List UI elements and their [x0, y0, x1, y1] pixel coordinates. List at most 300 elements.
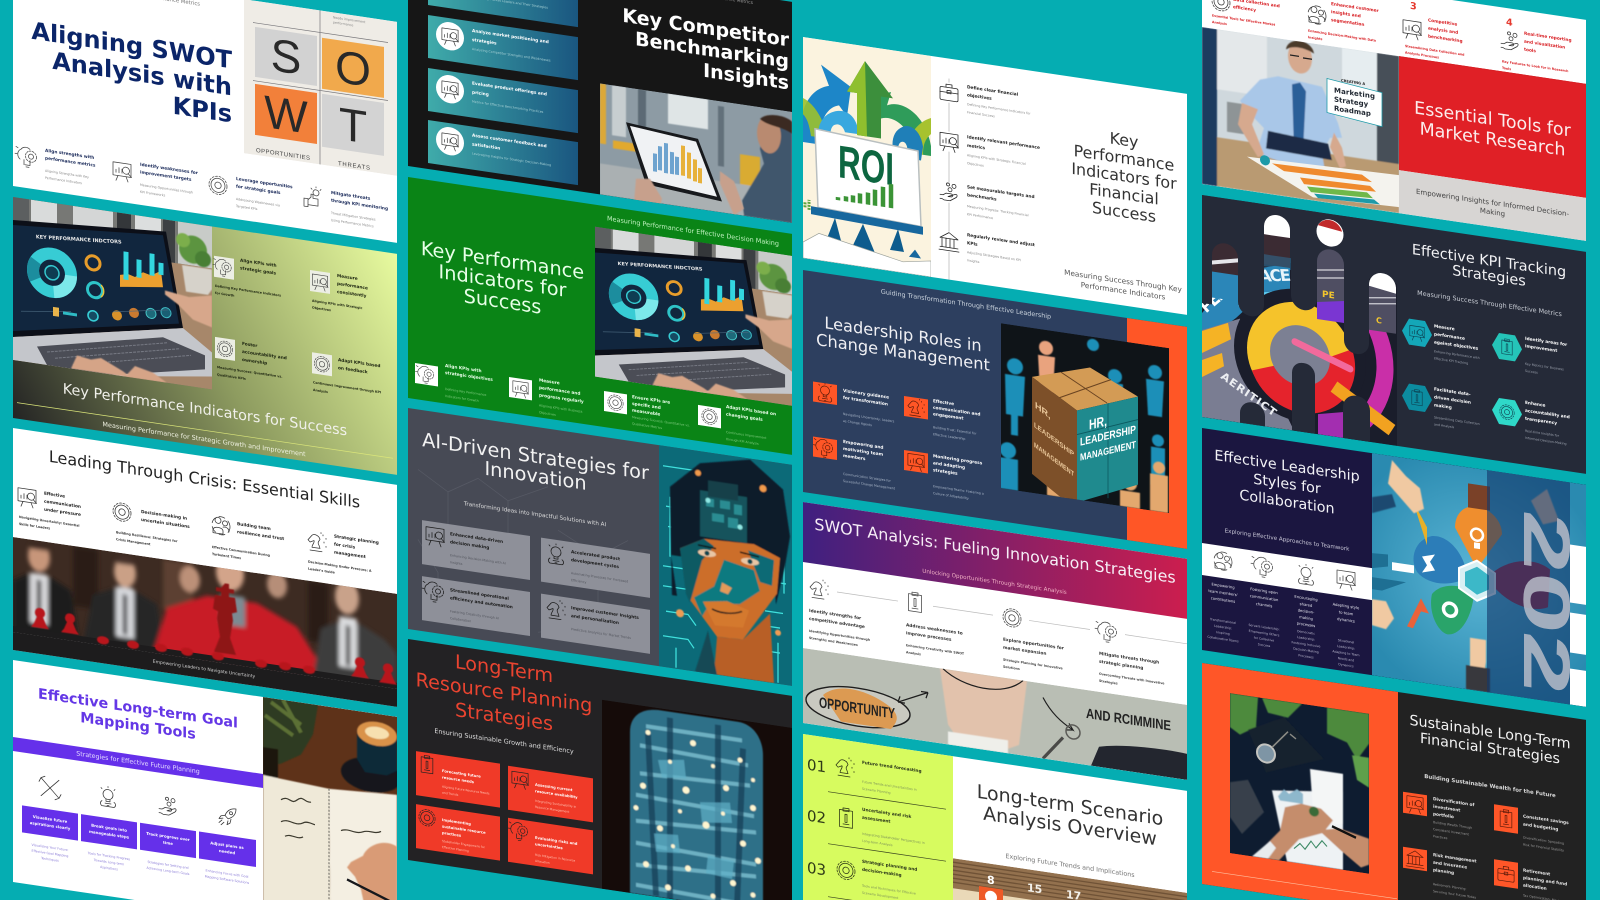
image: SWOT grid: W	[264, 85, 308, 144]
item: accountability: Real-time Insights for	[1525, 429, 1559, 438]
column: empowering: Inspiring	[1216, 630, 1230, 636]
subtitle: Empowering Insights for Informed Decision-	[1416, 187, 1569, 218]
item: competitive analysis: 3	[1410, 1, 1417, 13]
column: empowering: Collaborative Teams	[1207, 635, 1239, 643]
item: measurable targets: KPI Performance	[967, 212, 993, 220]
item: measure performance	[310, 269, 368, 318]
item: measure performance: Effective KPI Tracking	[1434, 356, 1468, 365]
item: effective communication: Effective	[44, 492, 65, 500]
title: Aligning SWOT	[31, 17, 232, 74]
card: implementing sustainable: Effective Planning	[442, 845, 469, 853]
card: operational efficiency	[422, 576, 530, 636]
column: adapting	[1332, 602, 1360, 669]
card: evaluate product offerings: Evaluate product offerings and	[472, 81, 547, 98]
item: visionary guidance: for transformation	[843, 395, 888, 408]
item: adapt KPIs	[698, 400, 776, 448]
image: calendar on wooden blinds: 8	[987, 873, 995, 887]
item: data efficiency: Analysis	[1212, 20, 1227, 26]
slide: Key Performance Indicators for Financial Success	[799, 36, 1187, 315]
item: align KPIs: strategic goals	[240, 265, 277, 277]
item: data-driven	[1402, 382, 1480, 433]
item: real-time reporting	[1501, 16, 1572, 80]
step 02: Long-term Analysis	[862, 839, 893, 847]
item: customer insights	[1308, 0, 1380, 50]
column: fostering: Empowering Others	[1249, 629, 1280, 637]
title: Success	[464, 284, 541, 319]
step: track progress: Track progress over	[146, 831, 190, 842]
item: align strengths: Align strengths with	[45, 149, 94, 161]
item: review and adjust	[939, 228, 1035, 272]
subtitle: Building Sustainable Wealth for the Future	[1424, 774, 1556, 799]
column: fostering: Fostering open	[1250, 587, 1278, 595]
step: break goals: Tools for Tracking Progress	[88, 851, 130, 861]
item: align KPIs: Defining Key Performance Indicators	[215, 284, 281, 298]
column: adapting: Needs and	[1338, 656, 1354, 663]
title: Sustainable Long-Term	[1409, 713, 1571, 753]
item: strengths	[809, 578, 898, 653]
image: hands around team hexagon: 202	[1509, 506, 1583, 699]
column: adapting: Adapting style	[1333, 602, 1359, 610]
column: encouraging: Decision-Making	[1293, 647, 1319, 654]
item: align KPIs: Align KPIs with	[240, 259, 277, 269]
image: SWOT grid: O	[335, 40, 371, 97]
item: measure performance: Aligning KPIs with Business	[539, 403, 582, 414]
title: Long-term Scenario	[977, 780, 1163, 830]
item: strategic planning: Decision-Making Under Pressure: A	[308, 560, 371, 573]
card: evaluate product offerings: pricing	[472, 89, 489, 98]
card: evaluate product offerings: Metrics for Effective Benchmarking Practices	[472, 99, 544, 114]
subtitle: Transforming Ideas into Impactful Solutions with AI	[463, 501, 606, 528]
image: calendar on wooden blinds	[953, 858, 1187, 900]
step: track progress	[140, 793, 196, 877]
item: relevant metrics: Aligning KPIs with Strategic Financial	[967, 153, 1026, 166]
image: KPI dial with finger cut-outs	[1195, 195, 1397, 446]
item: measure performance: performance and	[539, 385, 580, 397]
subtitle: Performance Indicators	[1081, 280, 1165, 302]
item: accountability	[1492, 395, 1570, 446]
item: adapt KPIs: changing goals	[726, 412, 763, 423]
item: decision-making: Building Resilience: Strategies for	[116, 530, 177, 543]
step: visualize	[22, 773, 78, 866]
item: ensure KPIs specific: Qualitative Metrics	[632, 422, 662, 430]
item: building team: Turbulent Times	[212, 552, 241, 560]
title: Collaboration	[1239, 488, 1335, 518]
card: data-driven decisions: Enhanced data-driven	[450, 532, 503, 545]
image: leadership cube and figures: HR,	[1035, 400, 1051, 422]
subtitle: Measuring Performance for Strategic Growth and Improvement	[102, 420, 306, 458]
step 02: 02	[807, 807, 826, 827]
item: strategic planning: Leader's Guide	[308, 567, 336, 575]
item: empowering teams: members	[843, 453, 866, 462]
item: define objectives: Define clear financial	[967, 85, 1018, 98]
item: adapt KPIs: Continuous Improvement	[726, 430, 766, 440]
item: adapt KPIs	[312, 352, 381, 402]
item: accountability: transparency	[1525, 416, 1557, 427]
step: adjust plans	[199, 804, 256, 886]
column: fostering: Servant Leadership:	[1248, 623, 1280, 631]
item: diversification: Practices	[1433, 834, 1448, 840]
item: measure performance: performance	[337, 281, 368, 292]
item: savings: Risk for Financial Stability	[1523, 843, 1564, 853]
item: adapt KPIs: Adapt KPIs based on	[726, 405, 776, 417]
title: Market Research	[1420, 119, 1565, 161]
image: marketing strategy roadmap	[1202, 27, 1399, 214]
item: empowering teams: Empowering and	[843, 440, 884, 451]
image: leadership cube and figures: MANAGEMENT	[1080, 440, 1137, 464]
item: measure performance: Aligning KPIs with Strategic	[312, 299, 362, 310]
icon: communication	[1251, 556, 1272, 578]
item: effective communication: Navigating Uncertainty: Essential	[19, 515, 79, 528]
step 03	[807, 851, 917, 900]
image: calendar on wooden blinds: 15	[1027, 881, 1042, 896]
item: identify areas: Identify areas for	[1525, 337, 1567, 348]
title: Strategies	[1452, 263, 1526, 290]
item: threats: Strategies	[1099, 679, 1118, 686]
column: encouraging: Fostering Inclusive	[1292, 640, 1321, 649]
step: break goals: Break goals into	[91, 823, 127, 833]
item: data efficiency	[1212, 0, 1280, 34]
subtitle: Guiding Transformation Through Effective Leadership	[881, 288, 1051, 321]
item: strategic planning: management	[334, 550, 366, 560]
card: evaluating risks: Evaluating risks and	[535, 836, 577, 846]
item: measure performance: Measure	[1434, 324, 1455, 332]
step: adjust plans: Adjust plans as	[210, 840, 244, 850]
image: notebook on wooden table	[263, 697, 397, 900]
card: analyze market positioning: strategies	[472, 37, 497, 47]
step: break goals	[81, 783, 137, 874]
title: Effective Leadership	[1214, 448, 1360, 485]
title: Effective Long-term Goal	[38, 686, 238, 732]
card: assess customer feedback: satisfaction	[472, 141, 500, 152]
title: Essential Tools for	[1414, 98, 1571, 142]
item: accountability: accountability and	[1525, 408, 1570, 420]
title: Key Performance	[421, 237, 584, 284]
item: mitigate threats: through KPI monitoring	[331, 198, 388, 212]
step 03: Tools and Techniques for Effective	[862, 884, 916, 896]
card: assess customer feedback: Assess customer feedback and	[472, 133, 547, 150]
item: mitigate threats	[304, 185, 388, 231]
item: risk management: Risk management	[1433, 853, 1476, 865]
title: Change Management	[816, 330, 990, 375]
column: empowering: contributions	[1211, 596, 1235, 604]
image: hands around team hexagon	[1372, 453, 1586, 707]
card: accelerated product	[541, 538, 650, 598]
item: effective communication: Building Trust: Essential for	[933, 425, 976, 436]
image: SWOT grid: THREATS	[338, 161, 370, 172]
subtitle panel	[1399, 170, 1586, 241]
item: visionary guidance: as Change Agents	[843, 419, 872, 427]
column: fostering: for Collective	[1254, 636, 1274, 643]
item: data-driven: Streamlining Data Collection	[1434, 415, 1480, 426]
image: SWOT grid: S	[271, 28, 301, 85]
slide: Long-Term Resource Planning Strategies	[408, 639, 792, 900]
card: accelerated product: Automating Processes for Increased	[571, 571, 628, 584]
item: measure performance: performance	[1434, 331, 1465, 342]
column: fostering: communication	[1250, 594, 1279, 602]
card: accelerated product: development cycles	[571, 557, 619, 570]
title: Strategies	[455, 698, 553, 735]
column: fostering: Success	[1258, 642, 1271, 648]
card: identify competitors	[428, 0, 578, 27]
step 02: Uncertainty and risk	[862, 808, 911, 820]
item: review and adjust: KPIs	[967, 240, 978, 248]
icon band	[1202, 543, 1372, 600]
image: SWOT grid: OPPORTUNITIES	[256, 148, 310, 162]
card: operational efficiency: efficiency and automation	[450, 595, 513, 611]
card: implementing sustainable: sustainable resource	[442, 825, 486, 835]
card: analyze market positioning: Analyze market positioning and	[472, 29, 549, 45]
image: KPI dial with finger cut-outs: AERITICT	[1219, 370, 1279, 419]
item: weaknesses: Enhancing Creativity with SWOT	[906, 643, 964, 656]
step: visualize: Techniques	[40, 856, 59, 863]
step: adjust plans: needed	[219, 848, 235, 855]
step: track progress: Achieving Long-term Goals	[147, 866, 190, 876]
image: chess king and executives	[13, 537, 397, 689]
item: strengths: Identifying Opportunities through	[809, 629, 870, 642]
item: threats: Mitigate threats through	[1099, 652, 1159, 666]
item: effective communication: engagement	[933, 411, 963, 422]
item: risk management: Retirement Planning:	[1433, 882, 1467, 891]
icon: shared decisions	[1298, 563, 1314, 586]
column: adapting: to team	[1339, 610, 1354, 616]
item: mitigate threats: Using Performance Metrics	[331, 218, 374, 228]
title: Financial Strategies	[1420, 731, 1560, 767]
item: savings	[1494, 804, 1569, 853]
item: competitive analysis: Competitive	[1428, 18, 1457, 28]
image: AI circuit face	[659, 445, 792, 686]
column: encouraging: making	[1299, 615, 1313, 621]
column: encouraging: Processes	[1298, 653, 1314, 660]
title: Styles for	[1253, 472, 1321, 498]
card: evaluating risks: Risk Mitigation in Resource	[535, 853, 575, 863]
card: accelerated product: Efficiency	[571, 578, 586, 584]
item: effective communication	[18, 487, 81, 535]
step: visualize: Visualize future	[33, 814, 67, 824]
item: measurable targets: Set measurable targets and	[967, 185, 1035, 200]
item: identify weaknesses	[113, 158, 199, 202]
column: encouraging: Democratic	[1297, 629, 1315, 636]
item: adapt KPIs: through KPI Analysis	[726, 437, 759, 446]
column: encouraging	[1292, 594, 1321, 661]
title panel	[1399, 56, 1586, 198]
item: relevant metrics	[940, 130, 1040, 176]
step 03: decision-making	[862, 867, 902, 879]
card: data-driven decisions	[422, 520, 530, 580]
card: implementing sustainable: Implementing	[442, 818, 471, 826]
item: measure performance: consistently	[337, 289, 367, 299]
item: align KPIs: Align KPIs with	[445, 364, 482, 374]
image: SWOT grid: T	[339, 97, 367, 153]
item: decision-making: Decision-making in	[141, 510, 187, 522]
image: glowing glass jars	[602, 700, 792, 900]
item: foster accountability: Qualitative KPIs	[217, 373, 246, 381]
item: opportunities: Solutions	[1003, 665, 1020, 671]
card: customer insights: Improved customer insights	[571, 606, 639, 621]
title: Long-Term	[455, 650, 553, 687]
item: ensure KPIs specific: Ensure KPIs are	[632, 395, 670, 406]
item: review and adjust: Regularly review and adjust	[967, 233, 1035, 248]
column: empowering: team members'	[1208, 589, 1238, 597]
item: measurable targets: Measuring Progress: Tracking Financial	[967, 204, 1029, 217]
card: operational efficiency: Streamlined operational	[450, 588, 509, 602]
card: accelerated product: Accelerated product	[571, 550, 620, 562]
item: visionary guidance: Visionary guidance	[843, 389, 889, 401]
item: weaknesses: Analysis	[906, 650, 921, 656]
title: Indicators for	[439, 260, 566, 302]
item: foster accountability: ownership	[242, 357, 267, 367]
item: relevant metrics: Objectives	[967, 161, 984, 168]
item: identify areas	[1492, 331, 1568, 379]
icon: adapting	[1337, 570, 1356, 591]
item: define objectives	[940, 80, 1031, 124]
slide: Key Performance Indicators for Success (olive)	[13, 197, 397, 475]
item: diversification: Building Wealth Through	[1433, 820, 1472, 830]
card: customer insights	[541, 594, 650, 654]
item: customer insights: insights and	[1331, 9, 1361, 19]
item: building team	[212, 515, 284, 567]
item: visionary guidance: Navigating Uncertainty: Leaders	[843, 412, 894, 424]
title: Insights	[703, 59, 789, 94]
item: monitoring progress: and adapting	[933, 460, 965, 471]
image: hands reviewing financial charts	[1230, 693, 1369, 874]
step 03: Strategic planning and	[862, 860, 917, 873]
item: customer insights: segmentation	[1331, 17, 1364, 28]
title: Leading Through Crisis: Essential Skills	[49, 447, 360, 512]
card: data-driven decisions: Enhancing Decision-Making with AI	[450, 553, 506, 565]
step: break goals: manageable steps	[89, 829, 130, 840]
column: empowering: Empowering	[1211, 582, 1235, 590]
footer caption: Empowering Leaders to Navigate Uncertainty	[153, 659, 256, 680]
image: ROI monitor with arrows: ROI	[838, 135, 894, 195]
item: measure performance: Objectives	[312, 306, 331, 312]
item: identify weaknesses: KPI Frameworks	[140, 190, 166, 198]
header band	[803, 502, 1187, 619]
item: measure performance: Measure	[539, 378, 560, 386]
card: forecasting: resource needs	[442, 776, 475, 784]
image: leadership cube and figures: HR,	[1089, 414, 1107, 434]
image: SWOT grid: Needs improvement	[333, 15, 365, 24]
card: customer insights: and personalization	[571, 613, 619, 626]
title: Performance	[1074, 141, 1174, 175]
item: measure performance: progress regularly	[539, 392, 584, 405]
item: identify weaknesses: Measuring Opportunities through	[140, 183, 193, 195]
item: foster accountability	[215, 337, 287, 387]
item: monitoring progress: Empowering Teams: Fostering a	[933, 484, 984, 496]
title: KPIs	[173, 92, 232, 128]
image: marketing strategy roadmap: Strategy	[1334, 95, 1369, 109]
item: effective communication: Effective Leadership	[933, 432, 965, 441]
item: identify weaknesses: improvement targets	[140, 169, 192, 183]
slide: Key Competitor Benchmarking Insights	[408, 0, 792, 226]
step 01: Future Trends and Uncertainties in	[862, 780, 917, 792]
item: weaknesses: improve processes	[906, 630, 952, 643]
item: diversification: investment	[1433, 804, 1460, 814]
step 01	[807, 752, 922, 800]
item: customer insights: Enhancing Decision-Making with Data	[1308, 29, 1376, 43]
item: define objectives: Defining Key Performance Indicators for	[967, 102, 1030, 116]
item: data-driven: driven decision	[1434, 394, 1471, 406]
subtitle: Exploring Effective Approaches to Teamwork	[1225, 528, 1350, 553]
title: Leadership Roles in	[824, 313, 982, 355]
item: review and adjust: Adjusting Strategies Based on KPI	[967, 250, 1021, 262]
item: retirement: allocation	[1523, 883, 1547, 892]
step: track progress: Strategies for Setting and	[147, 860, 189, 870]
item: monitoring progress	[904, 449, 984, 503]
column: encouraging: Encouraging	[1294, 595, 1318, 602]
item: building team: Building team	[237, 522, 271, 532]
column: fostering: channels	[1256, 602, 1272, 608]
item: competitive analysis: benchmarking	[1428, 33, 1463, 45]
step: visualize: Effective Goal Mapping	[32, 849, 68, 858]
column: encouraging: decision-	[1298, 608, 1315, 615]
item: risk management: planning	[1433, 867, 1454, 876]
subtitle: Ensuring Sustainable Growth and Efficiency	[434, 727, 574, 756]
column: empowering: Transformational	[1210, 617, 1236, 625]
card: operational efficiency: Fostering Creativity through AI	[450, 609, 499, 620]
item: ensure KPIs specific: Measuring Success: Quantitative vs.	[632, 415, 690, 428]
image: marketing strategy roadmap: CREATING A	[1341, 79, 1365, 86]
step 02: assessment	[862, 815, 891, 825]
card: assessing availability: Integrating Sustainability in	[535, 799, 576, 809]
slide: Key Performance Indicators for Success (green)	[408, 177, 792, 455]
card: analyze market positioning: Analyzing Competitor Strengths and Weaknesses	[472, 47, 551, 63]
card: assessing availability: resource availability	[535, 789, 578, 800]
item: real-time reporting: tools	[1524, 47, 1536, 54]
subtitle: Making	[1480, 206, 1505, 218]
title: Key Performance Indicators for Success	[63, 381, 347, 439]
footer band	[13, 632, 397, 707]
item: empowering teams: motivating team	[843, 446, 884, 458]
item: diversification	[1403, 792, 1474, 844]
column: encouraging: Leadership:	[1297, 635, 1315, 642]
item: measure performance	[1402, 318, 1480, 367]
item: real-time reporting: Key Features to Look for in Research	[1502, 59, 1568, 73]
item: adapt KPIs: on feedback	[338, 365, 368, 375]
item: diversification: Diversification of	[1433, 797, 1474, 808]
item: monitoring progress: strategies	[933, 467, 958, 477]
item: decision-making: Crisis Management	[116, 537, 151, 546]
item: foster accountability: accountability and	[242, 349, 287, 362]
slide: AI-Driven Strategies for Innovation	[408, 408, 792, 686]
item: adapt KPIs: Analysis	[313, 388, 328, 394]
slide: Aligning SWOT Analysis with KPIs	[13, 0, 397, 243]
title: Key Competitor	[622, 4, 789, 51]
item: real-time reporting: Real-time reporting	[1524, 32, 1572, 44]
card: forecasting	[416, 751, 500, 808]
image: KPI dial with finger cut-outs: ACE	[1257, 266, 1292, 286]
image: KPI dial with finger cut-outs: PEFC	[1195, 276, 1239, 318]
image: laptop dashboard	[13, 197, 212, 389]
item: risk management: and insurance	[1433, 860, 1467, 871]
subtitle: Unlocking Opportunities Through Strategic Analysis	[922, 569, 1067, 596]
item: effective communication: communication and	[933, 405, 980, 418]
step: adjust plans: Enhancing Focus with Goal	[206, 869, 248, 879]
slide: Effective Long-term Goal Mapping Tools	[13, 660, 401, 900]
item: decision-making: uncertain situations	[141, 517, 190, 530]
image: laptop dashboard	[595, 227, 792, 406]
item: effective communication: Effective	[933, 399, 954, 407]
card: forecasting: Forecasting future	[442, 769, 481, 779]
item: building team: Effective Communication During	[212, 545, 270, 558]
item: retirement: planning and fund	[1523, 875, 1567, 888]
item: ensure KPIs specific: measurable	[632, 408, 660, 418]
item: diversification: Consistent Investment	[1433, 827, 1470, 837]
card: forecasting: Aligning Future Resource Needs	[442, 785, 489, 796]
title: Benchmarking	[635, 27, 789, 73]
slide: Long-term Scenario Analysis Overview	[803, 734, 1187, 900]
item: align KPIs: for Growth	[215, 291, 235, 298]
item: leverage opportunities: Targeted KPIs	[235, 204, 258, 211]
